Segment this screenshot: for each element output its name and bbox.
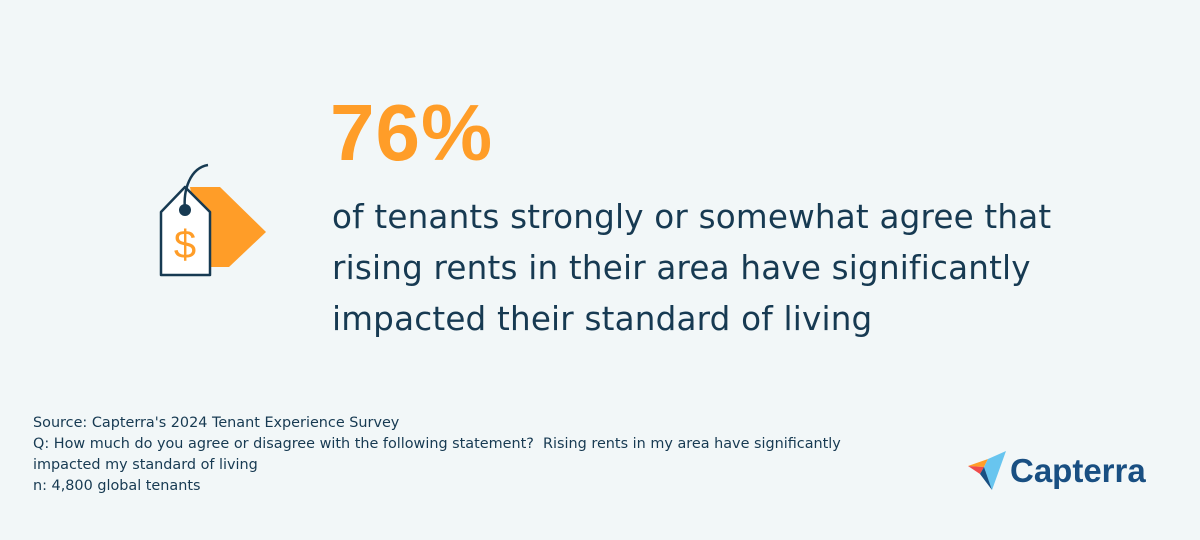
source note: impacted my standard of living — [33, 457, 258, 473]
icon: price tag — [160, 164, 266, 276]
source note: Q: How much do you agree or disagree with the following statement? Rising rents in my area have significantly — [33, 436, 841, 452]
statement text: impacted their standard of living — [332, 300, 872, 338]
icon: price tag: $ — [174, 223, 196, 267]
source note: Source: Capterra's 2024 Tenant Experience Survey — [33, 415, 399, 431]
statement text: rising rents in their area have significantly — [332, 249, 1031, 287]
source note: n: 4,800 global tenants — [33, 478, 200, 494]
headline stat: 76% — [330, 88, 493, 177]
source note — [33, 415, 841, 494]
statement text — [332, 198, 1051, 338]
statement text: of tenants strongly or somewhat agree that — [332, 198, 1051, 236]
logo: Capterra: Capterra — [1010, 452, 1146, 489]
